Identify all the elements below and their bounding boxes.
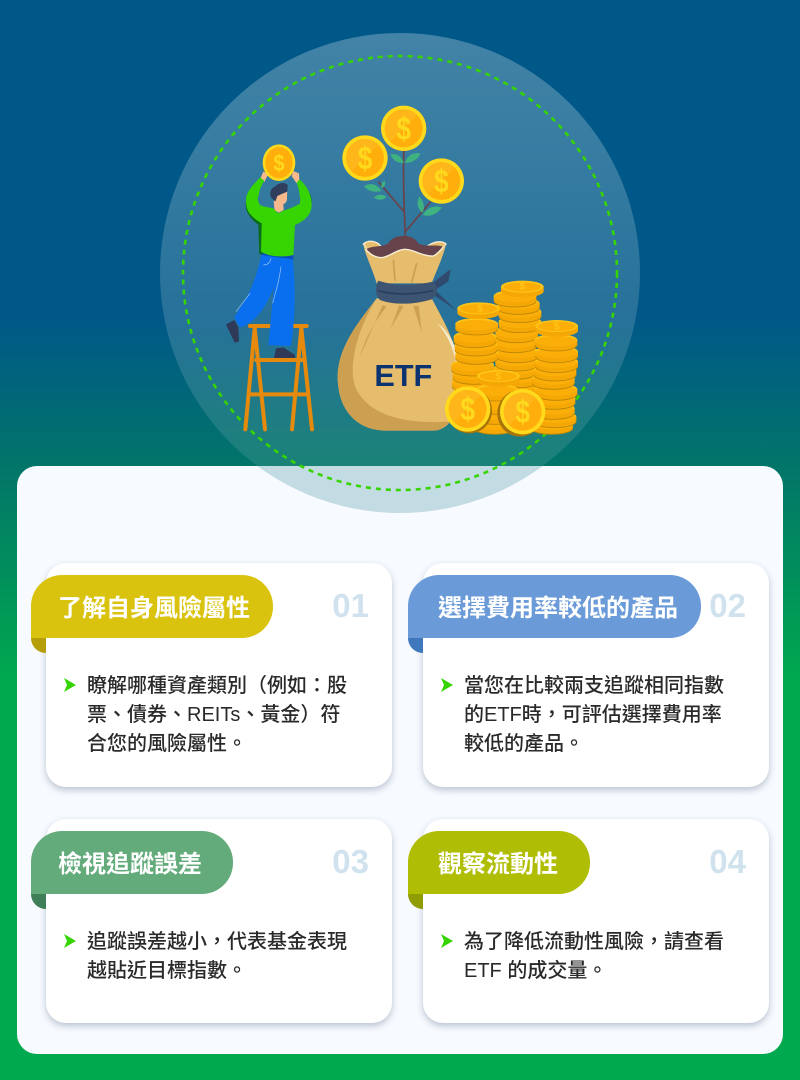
ladder <box>245 326 312 429</box>
text 01: 瞭解哪種資產類別（例如：股 <box>87 675 347 697</box>
heading pill 02 <box>408 575 701 638</box>
pill fold 03 <box>31 894 46 909</box>
ETF money bag: ETF <box>374 359 432 393</box>
plant: $ <box>358 142 372 177</box>
card 03 <box>46 819 392 1023</box>
text 01: 合您的風險屬性。 <box>87 733 247 755</box>
heading pill 04 <box>408 831 590 894</box>
number 04: 04 <box>709 843 746 880</box>
white panel <box>17 466 783 1054</box>
text 03: 追蹤誤差越小，代表基金表現 <box>87 931 347 953</box>
number 01: 01 <box>332 587 369 624</box>
coin stacks: $ <box>496 371 502 382</box>
heading pill 01 <box>31 575 273 638</box>
text 01 <box>87 674 347 755</box>
coin stacks <box>445 281 578 437</box>
arrow 01 <box>64 678 76 692</box>
text 04 <box>464 930 724 982</box>
coin stacks: $ <box>554 321 560 332</box>
heading pill 03 <box>31 831 233 894</box>
coin stacks: $ <box>460 393 475 428</box>
dashed ring <box>183 56 617 490</box>
pill fold 04 <box>408 894 423 909</box>
person: $ <box>273 149 285 176</box>
plant: $ <box>396 112 411 147</box>
coin stacks: $ <box>477 303 483 314</box>
illustration <box>226 106 578 437</box>
text 04: ETF 的成交量。 <box>464 960 607 982</box>
text 03: 越貼近目標指數。 <box>87 960 247 982</box>
text 02: 的ETF時，可評估選擇費用率 <box>464 704 722 726</box>
ETF money bag <box>338 236 461 431</box>
pill fold 02 <box>408 638 423 653</box>
circle backdrop <box>160 33 640 513</box>
pill fold 01 <box>31 638 46 653</box>
plant: $ <box>434 165 449 200</box>
text 01: 票、債券、REITs、黃金）符 <box>87 704 340 726</box>
text 04: 為了降低流動性風險，請查看 <box>464 931 724 953</box>
heading pill 03: 檢視追蹤誤差 <box>58 851 202 878</box>
text 02: 較低的產品。 <box>464 733 584 755</box>
number 03: 03 <box>332 843 369 880</box>
circle over panel <box>258 466 542 513</box>
coin stacks: $ <box>515 395 530 430</box>
arrow 03 <box>64 934 76 948</box>
number 02: 02 <box>709 587 746 624</box>
arrow 02 <box>441 678 453 692</box>
text 02: 當您在比較兩支追蹤相同指數 <box>464 675 724 697</box>
heading pill 01: 了解自身風險屬性 <box>58 595 250 622</box>
person <box>226 144 312 358</box>
card 04 <box>423 819 769 1023</box>
card 02 <box>423 563 769 787</box>
plant <box>342 106 464 237</box>
coin stacks: $ <box>520 282 526 293</box>
card 01 <box>46 563 392 787</box>
text 03 <box>87 930 347 982</box>
heading pill 02: 選擇費用率較低的產品 <box>438 595 678 622</box>
text 02 <box>464 674 724 755</box>
arrow 04 <box>441 934 453 948</box>
heading pill 04: 觀察流動性 <box>438 851 558 878</box>
